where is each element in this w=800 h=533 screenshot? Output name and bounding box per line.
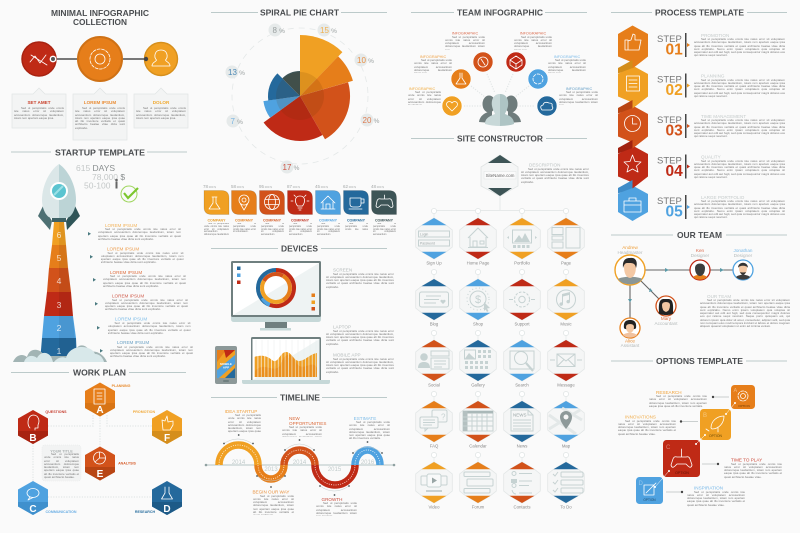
icon: red chart circle: [22, 42, 56, 76]
option A: [731, 385, 755, 409]
text: growth: GROWTH: [322, 497, 342, 502]
option B: B: [703, 413, 707, 419]
hexagon C communication: [18, 481, 77, 515]
option text: inspiration: [687, 486, 745, 508]
step text 4: LOREM IPSUM: [110, 270, 142, 275]
phone: MOBILE: [220, 362, 232, 366]
card 87: [287, 184, 312, 236]
description: DESCRIPTION: [529, 162, 560, 168]
card 95: 95 000 $: [259, 184, 272, 189]
hexagon E analysis: [85, 446, 137, 480]
tile: support: [504, 269, 540, 326]
tile: video: Video: [429, 504, 440, 510]
text: begin our way: BEGIN OUR WAY: [252, 490, 290, 494]
team description: [700, 294, 790, 333]
step text 6: [88, 223, 181, 242]
avatar: jonathan: Designer: [734, 253, 753, 258]
tile: portfolio: [504, 208, 540, 266]
tile: support: Support: [514, 322, 530, 326]
title: minimal infographic: COLLECTION: [73, 17, 127, 27]
spiral pie: [263, 35, 353, 141]
percent labels: 15 %: [320, 26, 337, 35]
step 05: 05: [666, 204, 683, 220]
tile: blog: Blog: [430, 322, 439, 326]
card 58: 58 000 $: [231, 184, 244, 189]
text: growth: [316, 497, 357, 516]
rocket flame stages: 5: [57, 253, 62, 263]
avatar: jonathan: Jonathan: [734, 248, 753, 253]
clouds: [13, 345, 107, 362]
heading: options template: OPTIONS TEMPLATE: [656, 356, 743, 366]
tile: forum: Forum: [472, 504, 485, 510]
year labels: 2014: [232, 460, 246, 466]
step text 3: [95, 294, 188, 312]
hexagon D research: D: [163, 504, 171, 515]
tile: page: Page: [561, 260, 572, 266]
phone: [215, 346, 237, 384]
year labels: 2016: [361, 460, 375, 466]
option C: OPTION: [675, 471, 689, 475]
tile: faq: ?: [441, 412, 446, 422]
heading: team infographic: TEAM INFOGRAPHIC: [457, 8, 543, 18]
stats: 50-100: [84, 180, 111, 190]
card 45: 45 000 $: [315, 184, 328, 189]
text: idea startup: IDEA STARTUP: [225, 409, 257, 414]
panel: timeline: [205, 392, 395, 516]
label: COMMUNICATION: [45, 510, 77, 514]
avatar: mary: Accountant: [654, 321, 678, 326]
avatar: ken: Designer: [691, 253, 710, 258]
tile: forum: [460, 452, 496, 510]
tile: faq: [416, 391, 452, 448]
tile: message: Message: [557, 382, 575, 388]
step 01: STEP: [657, 34, 682, 45]
step 03: TIME MANAGEMENT: [701, 114, 746, 119]
panel: minimal infographic collection: [12, 8, 188, 140]
icon: cube: [506, 52, 526, 72]
option A: OPTION: [738, 404, 750, 408]
step text 5: [90, 246, 184, 266]
team description: OUR TEAM: [707, 294, 731, 299]
card 78: COMPANY: [207, 218, 226, 222]
rocket: [38, 164, 80, 230]
step 04: QUALITY: [701, 154, 721, 160]
avatar: jonathan: [733, 248, 753, 280]
tile: search: Search: [515, 382, 529, 388]
text: screen: [326, 268, 394, 288]
panel: team infographic: [408, 8, 598, 126]
tile: social: [416, 330, 452, 388]
rocket flame stages: 6: [57, 230, 62, 240]
year labels: 2013: [264, 467, 278, 473]
title: minimal infographic: [51, 8, 149, 27]
phone: APP: [223, 366, 229, 370]
card 58: COMPANY: [235, 218, 254, 222]
tile: portfolio: Portfolio: [514, 260, 530, 266]
step 02: PLANNING: [701, 74, 725, 78]
label: QUESTIONS: [45, 410, 67, 414]
tile: news: [504, 391, 540, 448]
hexagon C communication: C: [29, 504, 37, 515]
label: top left: [445, 32, 485, 50]
icon: clouds: [537, 96, 557, 116]
text: laptop: [326, 324, 394, 346]
card 95: [259, 184, 284, 236]
text: estimate: [349, 416, 390, 441]
label: mid right: [548, 55, 586, 73]
stats: 78,000 $: [92, 172, 125, 182]
tile: calendar: Calendar: [469, 444, 487, 448]
step 04: 04: [666, 163, 683, 180]
tile: gallery: Gallery: [471, 382, 486, 388]
your title note: YOUR TITLE: [50, 450, 73, 454]
panel: startup template: [11, 148, 193, 362]
step 01: [657, 33, 785, 59]
label: low right: [559, 87, 598, 105]
description: [521, 162, 589, 186]
card 45: [315, 184, 340, 236]
card 95: COMPANY: [263, 218, 282, 222]
label: PROMOTION: [133, 410, 155, 414]
tile: shop: [460, 269, 496, 326]
tile: news: NEWS: [513, 412, 526, 418]
panel: work plan: [11, 368, 186, 515]
tile: sign up: [416, 208, 452, 266]
tile: map: [548, 391, 584, 448]
tile: social: Social: [428, 382, 440, 388]
text: laptop: LAPTOP: [333, 324, 351, 330]
step text 6: LOREM IPSUM: [105, 223, 137, 228]
hexagon B questions: [18, 410, 67, 444]
icon: cycle: [528, 69, 548, 89]
people group: [479, 94, 521, 126]
option text: research: RESEARCH: [656, 390, 682, 395]
step text 2: [97, 316, 190, 336]
year labels: 2014: [293, 460, 307, 466]
heading: devices: DEVICES: [281, 244, 318, 254]
tile: to do: To Do: [560, 504, 572, 510]
donut chart: [258, 270, 294, 306]
step text 1: LOREM IPSUM: [117, 340, 149, 345]
tile: news: News: [517, 444, 527, 448]
tile: video: [416, 452, 452, 510]
hexagon A planning: [85, 382, 131, 416]
panel: site constructor: [411, 134, 589, 510]
card 58: [231, 184, 256, 232]
stats: 615 DAYS: [76, 163, 115, 173]
label: low left: INFOGRAPHIC: [409, 87, 435, 91]
rocket flame stages: 1: [57, 346, 62, 356]
option B: OPTION: [709, 434, 723, 438]
avatar: alice: [620, 318, 640, 348]
text: idea startup: [225, 409, 261, 434]
heading: work plan: WORK PLAN: [73, 368, 126, 378]
card 87: 87 000 $: [287, 184, 300, 189]
step 03: [657, 114, 785, 140]
icon: green check: [121, 186, 138, 202]
step text 4: [93, 270, 186, 289]
avatar: alice: Alice: [625, 338, 635, 344]
icon: flask: [451, 69, 471, 89]
avatar: ken: [690, 248, 710, 280]
icon: heart: [442, 96, 462, 116]
panel: options template: [611, 356, 787, 508]
tile: gallery: [460, 330, 496, 388]
option A: A: [734, 388, 738, 394]
card 62: COMPANY: [347, 218, 366, 222]
avatar: mary: [654, 296, 678, 326]
tile: sign up: Sign Up: [426, 260, 442, 266]
text: mobile app: MOBILE APP: [333, 352, 361, 358]
tile: calendar: [460, 391, 496, 448]
year labels: 2015: [328, 467, 342, 473]
percent labels: 17 %: [282, 163, 300, 172]
title: minimal infographic: MINIMAL INFOGRAPHIC: [51, 8, 149, 18]
tile: contacts: Contacts: [514, 504, 530, 510]
card 45: COMPANY: [319, 218, 338, 222]
tile: music: [548, 269, 584, 326]
hexagon E analysis: E: [97, 469, 104, 480]
site root hexagon: SiteName.com: [486, 173, 515, 178]
step 02: 02: [666, 82, 683, 99]
option text: innovations: [618, 414, 676, 438]
panel: process template: [611, 8, 787, 221]
rocket flame stages: 2: [57, 323, 62, 333]
tile: contacts: [504, 452, 540, 510]
step 01: 01: [666, 42, 683, 58]
label: RESEARCH: [135, 510, 155, 514]
card 62: 62 000 $: [343, 184, 356, 189]
hexagon F promotion: F: [164, 433, 170, 444]
rocket flame stages: [40, 222, 77, 362]
card 48: COMPANY: [375, 218, 394, 222]
step 03: 03: [666, 122, 683, 140]
label: top right: [514, 32, 552, 50]
your title note: [42, 445, 81, 481]
option B: [700, 409, 731, 440]
option text: time to play: TIME TO PLAY: [731, 458, 762, 462]
connector dots: [654, 402, 736, 488]
heading: spiral pie chart: SPIRAL PIE CHART: [260, 8, 340, 18]
option text: innovations: INNOVATIONS: [625, 414, 656, 420]
step 02: STEP: [657, 74, 682, 86]
heading: our team: OUR TEAM: [677, 230, 722, 240]
icon: yellow people circle: [144, 42, 178, 76]
avatar: alice: Assistant: [621, 343, 640, 348]
heading: timeline: TIMELINE: [280, 392, 320, 402]
hexagon D research: [135, 481, 182, 515]
panel: company cards: [203, 184, 396, 236]
monitor: [231, 261, 321, 330]
tile: home page: Home Page: [467, 260, 490, 266]
pointer lines: [666, 396, 729, 493]
tile: blog: [416, 269, 452, 326]
label: top right: INFOGRAPHIC: [520, 32, 546, 36]
process hexagon ribbon: [618, 26, 648, 221]
tile: sign up: Login: [420, 232, 428, 236]
avatar: andrew: [615, 245, 645, 285]
percent labels: 20 %: [362, 116, 380, 125]
icon: orange gear circle: [78, 37, 122, 81]
card: set amet: [12, 88, 66, 128]
step 04: [657, 154, 785, 180]
label: mid right: INFOGRAPHIC: [554, 55, 580, 59]
tile: map: Map: [562, 444, 571, 448]
tile: message: [548, 330, 584, 388]
card: lorem ipsum: [73, 88, 127, 140]
option D: D: [638, 481, 644, 487]
avatar: mary: Mary: [661, 316, 672, 321]
card 87: COMPANY: [291, 218, 310, 222]
rocket flame stages: 4: [57, 276, 62, 286]
hexagon A planning: A: [96, 405, 104, 416]
step 05: STEP: [657, 196, 682, 207]
hexagon B questions: B: [29, 433, 37, 444]
tile: sign up: Password: [420, 242, 435, 246]
text: estimate: ESTIMATE: [354, 416, 376, 421]
text: new opportunities: OPPORTUNITIES: [289, 421, 326, 426]
site root hexagon: [481, 155, 518, 196]
avatar: andrew: Andrew: [622, 245, 638, 250]
option text: research: [649, 390, 707, 409]
panel: devices: [211, 244, 394, 384]
panel: our team: [611, 230, 790, 348]
card 62: [343, 184, 368, 230]
rocket flame stages: 3: [57, 300, 62, 310]
label: PLANNING: [112, 384, 131, 388]
tile: search: [504, 330, 540, 388]
option C: C: [666, 445, 671, 451]
card 48: [371, 184, 396, 236]
tile: faq: FAQ: [430, 444, 439, 448]
stats: [76, 163, 125, 190]
card: dolor: [134, 88, 188, 128]
step 01: PROMOTION: [701, 33, 729, 38]
text: begin our way: [252, 490, 294, 514]
step text 5: LOREM IPSUM: [107, 246, 139, 252]
heading: process template: PROCESS TEMPLATE: [655, 8, 744, 18]
axis: [205, 464, 395, 466]
label: mid left: [414, 55, 452, 73]
percent labels: 8 %: [272, 26, 285, 35]
panel: spiral pie chart: [211, 8, 387, 174]
tile: shop: Shop: [473, 322, 484, 326]
card: set amet: SET AMET: [27, 100, 51, 105]
laptop: [242, 337, 330, 384]
tile: page: [548, 208, 584, 266]
text: screen: SCREEN: [333, 268, 352, 272]
heading: site constructor: SITE CONSTRUCTOR: [457, 134, 543, 144]
icon: coin: [473, 52, 493, 72]
option D: [636, 477, 663, 504]
timeline pins: [223, 434, 383, 496]
label: top left: INFOGRAPHIC: [452, 32, 478, 36]
label: mid left: INFOGRAPHIC: [420, 55, 446, 59]
option C: [663, 440, 700, 477]
percent labels: 13 %: [228, 68, 245, 77]
label: low left: [408, 87, 441, 105]
percent labels: 7 %: [230, 117, 243, 126]
step text 2: LOREM IPSUM: [115, 316, 147, 322]
card 78: [203, 184, 229, 236]
winding road: [219, 439, 382, 491]
card 48: 48 000 $: [371, 184, 384, 189]
card: dolor: DOLOR: [153, 100, 170, 105]
avatar: andrew: Headmaster: [617, 250, 643, 255]
text: mobile app: [326, 352, 394, 374]
percent labels: [226, 24, 380, 174]
label: low right: INFOGRAPHIC: [566, 87, 592, 91]
option text: inspiration: INSPIRATION: [694, 486, 723, 490]
text: new opportunities: NEW: [289, 416, 300, 421]
option text: time to play: [724, 458, 782, 480]
card: lorem ipsum: LOREM IPSUM: [84, 100, 116, 105]
label: ANALYSIS: [118, 462, 137, 466]
step 05: LARGE PORTFOLIO: [701, 195, 745, 200]
org chart connectors: [628, 268, 743, 328]
tile: music: Music: [560, 322, 572, 326]
step text 1: [100, 340, 193, 360]
hexagon F promotion: [133, 410, 182, 444]
year labels: [232, 460, 375, 473]
tile: shop: $: [475, 294, 481, 306]
step 05: [657, 195, 785, 221]
text: new opportunities: [282, 416, 326, 437]
avatar: ken: Ken: [696, 248, 705, 253]
tile: to do: [548, 452, 584, 510]
card 78: 78 000 $: [203, 184, 216, 189]
option D: OPTION: [643, 498, 656, 502]
heading: startup template: STARTUP TEMPLATE: [55, 148, 145, 158]
step 02: [657, 74, 785, 100]
tile: home page: [460, 208, 496, 266]
step text 3: LOREM IPSUM: [112, 294, 144, 298]
step 03: STEP: [657, 115, 682, 126]
step 04: STEP: [657, 156, 682, 166]
percent labels: 10 %: [357, 56, 374, 65]
